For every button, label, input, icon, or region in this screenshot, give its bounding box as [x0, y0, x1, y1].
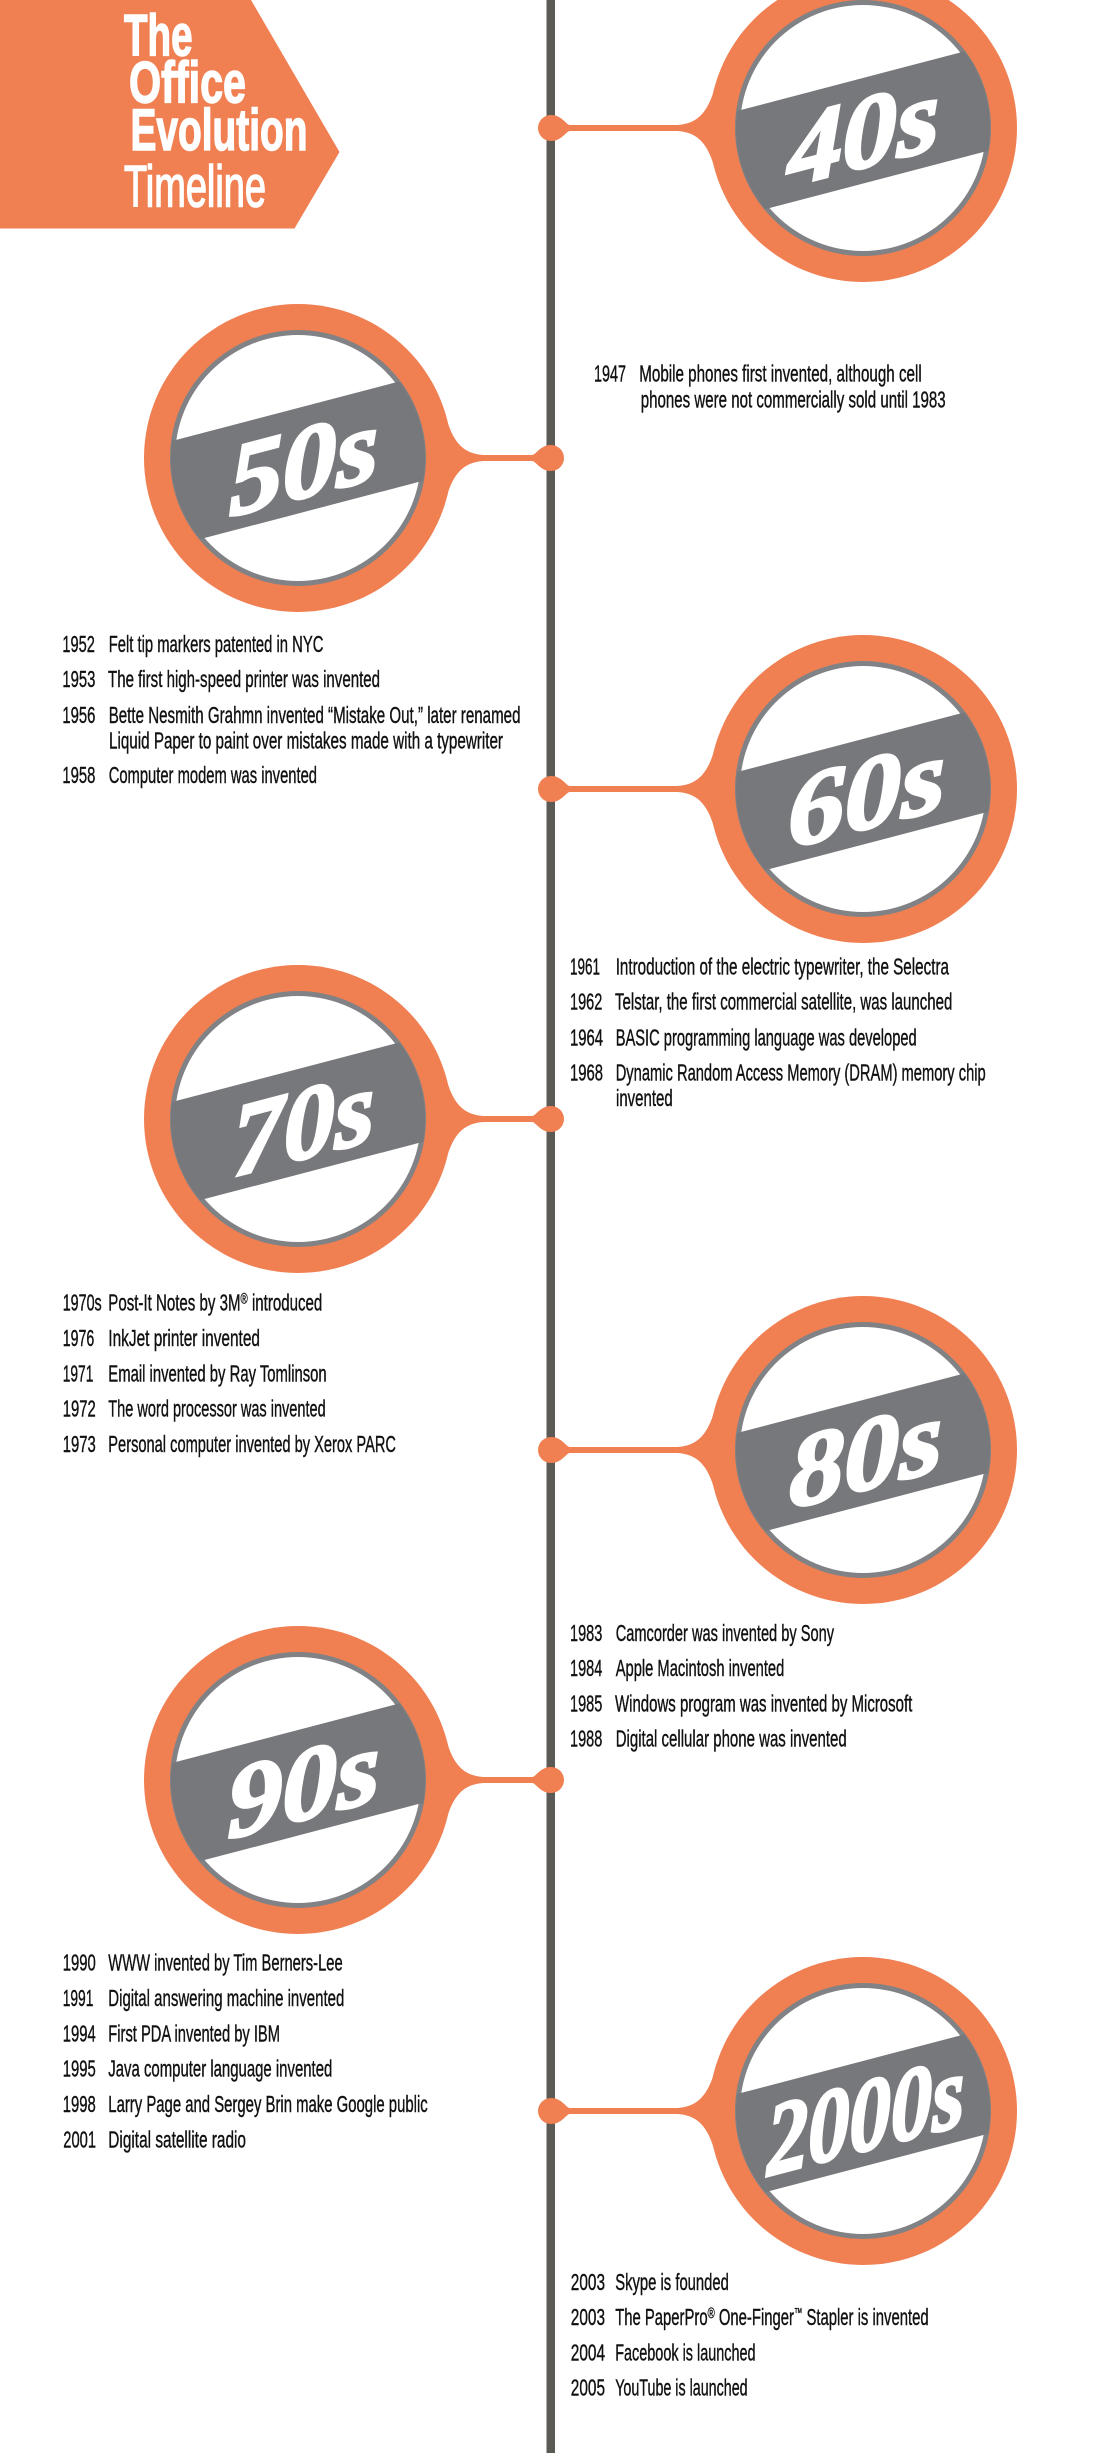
text block: 1990s events: 1991 [63, 1985, 93, 2011]
text block: 1970s events: 1973 [63, 1431, 96, 1457]
text block: 1980s events: Camcorder was invented by Sony [616, 1620, 834, 1646]
text block: 1980s events [570, 1620, 913, 1752]
text block: 1970s events: 1971 [63, 1360, 93, 1386]
text block: 1990s events: First PDA invented by IBM [108, 2020, 280, 2046]
text block: 1980s events: Windows program was invented by Microsoft [615, 1690, 913, 1716]
text block: 1980s events: 1984 [570, 1655, 602, 1681]
text block: 1990s events: 1998 [63, 2091, 96, 2117]
text block: 1950s events: 1952 [62, 631, 95, 657]
decade label: 70s: 70s [232, 1048, 375, 1199]
text block: 1960s events: 1962 [570, 989, 602, 1015]
text block: 1940s events: Mobile phones first invented, although cell [639, 361, 922, 387]
title text: Timeline [124, 154, 266, 220]
text block: 1990s events: Larry Page and Sergey Brin make Google public [108, 2091, 428, 2117]
text block: 1950s events: Computer modem was invented [109, 762, 317, 788]
text block: 1990s events: 1990 [63, 1950, 96, 1976]
text block: 2000s events: Skype is founded [615, 2269, 729, 2295]
text block: 1960s events [570, 953, 986, 1111]
text block: 1970s events: Post-It Notes by 3M [108, 1290, 310, 1316]
text block: 2000s events: 2003 [571, 2269, 605, 2295]
text block: 1990s events: 2001 [63, 2126, 96, 2152]
title text [124, 4, 308, 220]
text block: 2000s events: 2005 [571, 2375, 605, 2401]
text block: 2000s events: Facebook is launched [615, 2339, 756, 2365]
title text: Office [129, 50, 246, 116]
decade label: 50s: 50s [228, 386, 379, 539]
text block: 2000s events: ™ [794, 2305, 802, 2320]
title text: The [124, 4, 192, 68]
text block: 2000s events [571, 2269, 929, 2401]
text block: 1970s events: introduced [248, 1290, 322, 1316]
text block: 2000s events: YouTube is launched [615, 2375, 748, 2401]
decade badge: 60s [538, 635, 1017, 943]
text block: 1950s events: The first high-speed printer was invented [108, 666, 380, 692]
text block: 1980s events: Apple Macintosh invented [616, 1655, 784, 1681]
text block: 1990s events: 1994 [63, 2020, 96, 2046]
text block: 1970s events: 1976 [63, 1325, 94, 1351]
text block: 1960s events: BASIC programming language was developed [616, 1024, 917, 1050]
decade label: 80s: 80s [788, 1378, 943, 1531]
text block: 1980s events: Digital cellular phone was invented [616, 1726, 847, 1752]
text block: 1970s events: Personal computer invented by Xerox PARC [108, 1431, 396, 1457]
text block: 2000s events: ® [708, 2305, 715, 2322]
text block: 1980s events: 1983 [570, 1620, 602, 1646]
decade label: 60s: 60s [788, 716, 946, 871]
text block: 1970s events: Email invented by Ray Tomlinson [108, 1360, 327, 1386]
decade badge: 2000s [538, 1957, 1017, 2265]
text block: 1950s events: Bette Nesmith Grahmn invented “Mistake Out,” later renamed [109, 702, 520, 728]
text block: 1940s events: 1947 [594, 361, 626, 387]
text block: 2000s events: 2004 [571, 2339, 605, 2365]
text block: 1970s events: 1970s [63, 1290, 102, 1316]
text block: 1980s events: 1985 [570, 1690, 602, 1716]
decade badge: 50s [144, 304, 564, 612]
decade label: 90s: 90s [227, 1708, 380, 1861]
text block: 1960s events: 1961 [570, 953, 600, 979]
text block: 1960s events: invented [616, 1085, 673, 1111]
decade badge: 90s [144, 1626, 564, 1934]
text block: 1950s events: Felt tip markers patented in NYC [109, 631, 323, 657]
text block: 1960s events: 1968 [570, 1060, 603, 1086]
text block: 1990s events: 1995 [63, 2056, 96, 2082]
text block: 2000s events: Stapler is invented [802, 2304, 929, 2330]
text block: 1940s events [594, 361, 946, 413]
text block: 1960s events: 1964 [570, 1024, 603, 1050]
text block: 1990s events: Digital satellite radio [108, 2126, 246, 2152]
decade badge: 70s [144, 965, 564, 1273]
decade badge: 80s [538, 1296, 1017, 1604]
vertical timeline line [546, 0, 555, 2453]
text block: 1950s events: 1956 [62, 702, 95, 728]
text block: 1970s events [63, 1290, 396, 1457]
text block: 1950s events [62, 631, 521, 788]
text block: 1990s events: Java computer language invented [108, 2056, 332, 2082]
text block: 1950s events: Liquid Paper to paint over mistakes made with a typewriter [109, 728, 503, 754]
text block: 1950s events: 1953 [62, 666, 95, 692]
text block: 1990s events: WWW invented by Tim Berners-Lee [108, 1950, 343, 1976]
text block: 1980s events: 1988 [570, 1726, 602, 1752]
text block: 1940s events: phones were not commercially sold until 1983 [641, 387, 946, 413]
decade label: 40s: 40s [785, 56, 940, 210]
text block: 1990s events [63, 1950, 428, 2152]
text block: 1990s events: Digital answering machine invented [108, 1985, 344, 2011]
text block: 2000s events: The PaperPro [615, 2304, 758, 2330]
decade label: 2000s: 2000s [765, 2033, 965, 2199]
text block: 1970s events: InkJet printer invented [108, 1325, 260, 1351]
title banner [0, 0, 340, 228]
banner arrow shape [0, 0, 340, 228]
title text: Evolution [130, 98, 308, 163]
text block: 1970s events: 1972 [63, 1396, 96, 1422]
text block: 2000s events: One-Finger [715, 2304, 794, 2330]
text block: 1970s events: The word processor was invented [108, 1396, 326, 1422]
text block: 1950s events: 1958 [62, 762, 95, 788]
text block: 1970s events: ® [241, 1291, 248, 1308]
decade badge: 40s [538, 0, 1017, 282]
text block: 2000s events: 2003 [571, 2304, 605, 2330]
